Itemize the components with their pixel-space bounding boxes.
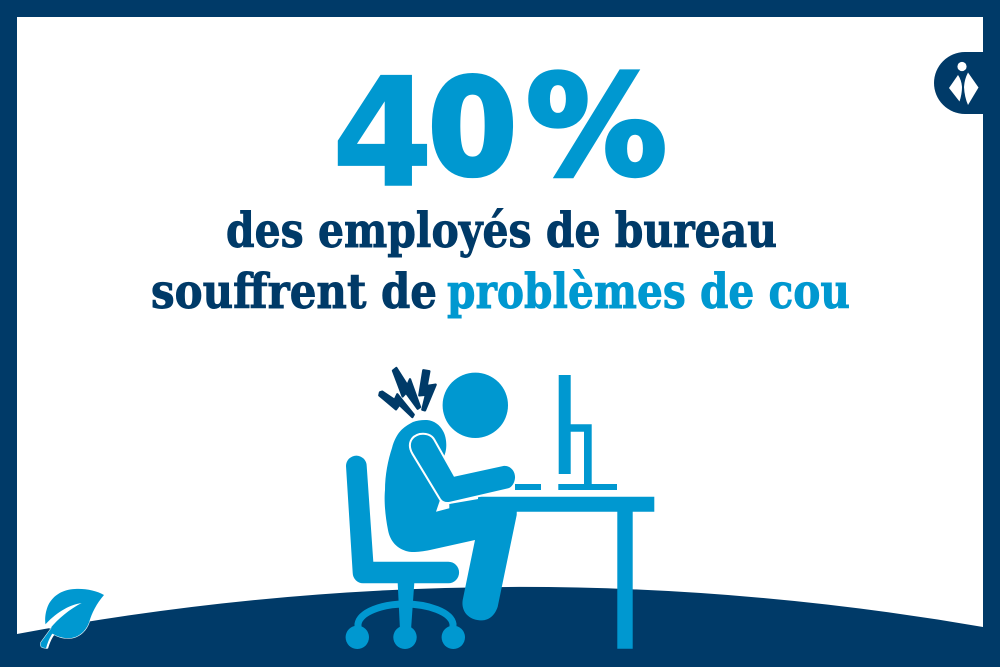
monitor bbox=[558, 375, 617, 490]
heading text: problèmes de cou bbox=[447, 264, 850, 320]
big statistic: 40% bbox=[332, 46, 667, 221]
big statistic: 40%: 0 bbox=[428, 52, 517, 206]
icon: leaf logo bbox=[41, 589, 104, 649]
logo tab: silhouette icon bbox=[934, 52, 984, 114]
big statistic: 40%: % bbox=[526, 46, 667, 207]
keyboard bbox=[515, 484, 541, 490]
head bbox=[443, 373, 508, 438]
heading text: souffrent de bbox=[151, 264, 437, 320]
chair bbox=[346, 456, 465, 649]
body and leg bbox=[385, 420, 517, 620]
arm with white outline bbox=[411, 435, 515, 502]
desk bbox=[478, 497, 654, 649]
heading text bbox=[151, 203, 850, 320]
big statistic: 40%: 4 bbox=[332, 47, 433, 221]
pain lightning bolts bbox=[379, 368, 436, 417]
heading text: des employés de bureau bbox=[226, 203, 777, 259]
icon: office worker at desk with neck pain bbox=[346, 368, 654, 649]
